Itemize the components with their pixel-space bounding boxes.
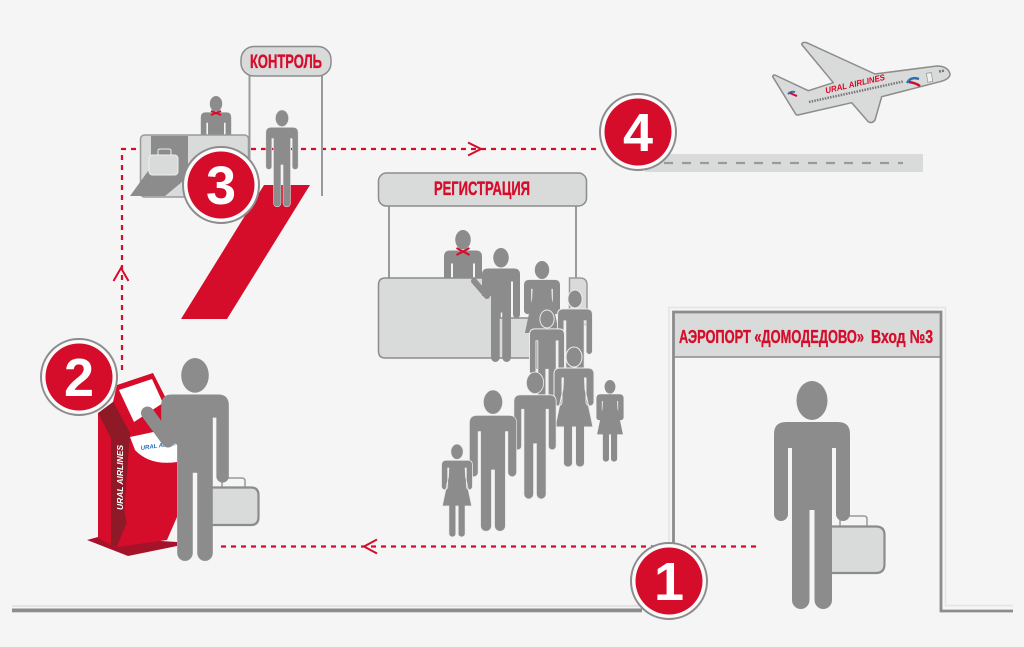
passenger at kiosk	[148, 358, 229, 561]
floor line left	[12, 605, 642, 612]
badge 1	[631, 543, 707, 619]
man in queue	[558, 290, 592, 395]
kiosk logo: URAL AIRLINES	[140, 440, 187, 452]
arrow: leftward chevron	[364, 540, 377, 554]
baggage scanner	[130, 135, 248, 197]
kiosk side text: URAL AIRLINES	[115, 445, 125, 510]
woman in queue	[524, 261, 560, 369]
child in queue	[442, 444, 472, 537]
suitcase at entrance	[825, 516, 884, 573]
passenger at control	[266, 110, 298, 207]
control label: КОНТРОЛЬ	[250, 52, 322, 73]
airport entrance	[669, 308, 1013, 611]
entrance sign text: door number: Вход №3	[871, 326, 933, 347]
badge 2: 2	[64, 348, 94, 408]
control frame	[241, 46, 331, 196]
badge 2	[41, 339, 117, 415]
check-in counter	[378, 278, 587, 358]
child in queue	[596, 380, 624, 462]
check-in sign	[378, 173, 586, 206]
entrance sign text: АЭРОПОРТ «ДОМОДЕДОВО»	[679, 326, 864, 347]
security attendant	[201, 96, 231, 187]
suitcase on scanner	[149, 149, 178, 175]
man in queue	[530, 310, 564, 415]
check-in label: РЕГИСТРАЦИЯ	[434, 179, 530, 200]
passenger at entrance	[774, 381, 850, 609]
badge 1: 1	[654, 552, 684, 612]
airplane	[773, 42, 950, 123]
suitcase at kiosk	[205, 478, 258, 525]
man in queue	[469, 390, 517, 531]
check-in frame	[389, 206, 576, 282]
man at counter	[474, 248, 520, 362]
check-in attendant	[444, 230, 482, 344]
arrow: rightward chevron	[468, 142, 481, 156]
dashed route: entrance to kiosk	[218, 545, 756, 548]
entrance sign	[674, 313, 941, 357]
red carpet	[181, 185, 310, 319]
airline name on fuselage: URAL AIRLINES	[824, 72, 886, 95]
queue of passengers	[442, 248, 624, 537]
badge 4: 4	[623, 103, 653, 163]
control sign	[241, 46, 331, 76]
dashed route: check-in to control to runway	[122, 149, 600, 370]
man in queue	[514, 372, 556, 499]
check-in kiosk	[87, 373, 187, 556]
runway	[645, 154, 923, 172]
woman in queue	[554, 347, 594, 467]
arrow: upward chevron	[114, 268, 128, 281]
badge 3	[183, 147, 259, 223]
badge 3: 3	[206, 156, 236, 216]
badge 4	[600, 94, 676, 170]
